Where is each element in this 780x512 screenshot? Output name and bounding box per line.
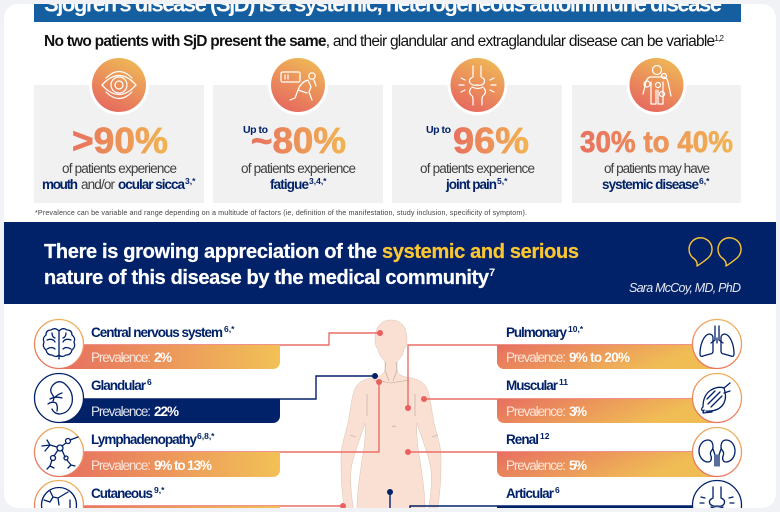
panel: systemic disease: 6,* bbox=[699, 176, 710, 186]
connector: central nervous system bbox=[84, 330, 383, 345]
connector: cutaneous bbox=[84, 503, 346, 509]
row: lymphadenopathy: 6,8,* bbox=[197, 431, 215, 441]
row: pulmonary bbox=[497, 320, 742, 369]
row: muscular: 11 bbox=[559, 377, 568, 387]
row: glandular bbox=[34, 374, 280, 423]
quote heading: There is growing appreciation of the bbox=[44, 241, 377, 263]
row: lymphadenopathy: Lymphadenopathy bbox=[91, 432, 197, 447]
icon: skin bbox=[42, 488, 76, 512]
panel: joint pain: 5,* bbox=[497, 176, 508, 186]
subheading: No two patients with SjD present the same, and their glandular and extraglandular disease can be variable bbox=[44, 33, 715, 50]
panel: sicca: 3,* bbox=[185, 176, 196, 186]
panel: fatigue: Up to bbox=[243, 124, 268, 136]
row: articular: 6 bbox=[555, 485, 560, 495]
row: glandular: 22% bbox=[154, 404, 179, 419]
row: pulmonary: Pulmonary bbox=[506, 325, 567, 340]
panel: systemic disease: systemic disease bbox=[602, 177, 699, 192]
icon: lungs bbox=[700, 326, 734, 356]
icon: joint bbox=[700, 487, 734, 508]
row: articular: Articular bbox=[506, 486, 555, 501]
row: articular bbox=[497, 480, 742, 512]
row: central nervous system: 6,* bbox=[224, 324, 235, 334]
quote heading: systemic and serious bbox=[382, 241, 579, 263]
row: glandular: 6 bbox=[147, 377, 152, 387]
connector: articular bbox=[387, 489, 692, 512]
panel: fatigue: ~80% bbox=[251, 120, 346, 161]
body figure bbox=[341, 320, 441, 512]
panel: joint pain: 96% bbox=[453, 120, 529, 161]
row: cutaneous bbox=[34, 480, 280, 512]
panel: fatigue: 3,4,* bbox=[309, 176, 327, 186]
icon: lymph nodes bbox=[42, 437, 78, 469]
row: muscular: Prevalence: bbox=[506, 404, 566, 419]
row: central nervous system: Central nervous system bbox=[91, 325, 223, 340]
subheading: 1,2 bbox=[714, 34, 725, 43]
icon: body with affected sites bbox=[643, 66, 671, 104]
row: lymphadenopathy: Prevalence: bbox=[91, 458, 151, 473]
row: muscular: Muscular bbox=[506, 378, 559, 393]
connector: renal bbox=[405, 449, 692, 455]
icon: eye bbox=[102, 72, 136, 98]
panel: sicca: of patients experience bbox=[62, 161, 177, 176]
panel: fatigue: of patients experience bbox=[241, 161, 356, 176]
row: renal: 12 bbox=[540, 431, 550, 441]
row: central nervous system: 2% bbox=[154, 350, 172, 365]
row: muscular: 3% bbox=[569, 404, 587, 419]
panel: joint pain: joint pain bbox=[445, 177, 497, 192]
icon: gland bbox=[48, 382, 72, 414]
footnote: *Prevalence can be variable and range depending on a multitude of factors (ie, definition of the manifestation, study inclusion, specificity of symptom). bbox=[35, 208, 527, 217]
panel: sicca: ocular sicca bbox=[118, 177, 185, 192]
quote heading: 7 bbox=[489, 267, 495, 279]
icon: knee joint bbox=[459, 66, 496, 105]
panel: systemic disease bbox=[572, 55, 741, 203]
panel: joint pain bbox=[392, 55, 562, 203]
icon: kidneys bbox=[699, 440, 735, 466]
row: cutaneous: 9,* bbox=[154, 485, 165, 495]
row: central nervous system bbox=[34, 320, 280, 369]
row: renal: Prevalence: bbox=[506, 458, 566, 473]
connector: pulmonary bbox=[405, 345, 692, 411]
quote band bbox=[4, 222, 776, 304]
panel: systemic disease: of patients may have bbox=[604, 161, 710, 176]
panel: sicca: >90% bbox=[72, 120, 168, 161]
panel: joint pain: of patients experience bbox=[420, 161, 535, 176]
row: cutaneous: Cutaneous bbox=[91, 486, 153, 501]
icon: muscle bbox=[702, 383, 730, 413]
panel: systemic disease: 30% to 40% bbox=[580, 126, 733, 159]
attribution: Sara McCoy, MD, PhD bbox=[629, 281, 741, 295]
row: pulmonary: 10,* bbox=[568, 324, 584, 334]
connector: lymphadenopathy bbox=[84, 379, 382, 452]
panel: joint pain: Up to bbox=[426, 124, 451, 136]
panel: fatigue: fatigue bbox=[270, 177, 309, 192]
quote heading: nature of this disease by the medical community bbox=[44, 267, 490, 289]
row: lymphadenopathy: 9% to 13% bbox=[154, 458, 212, 473]
row: glandular: Glandular bbox=[91, 378, 147, 393]
connector: glandular bbox=[84, 373, 378, 399]
row: renal bbox=[497, 428, 742, 477]
panel: sicca: mouth bbox=[42, 177, 78, 192]
panel: sicca bbox=[34, 55, 204, 203]
panel: fatigue bbox=[213, 55, 383, 203]
icon: quotation marks bbox=[689, 238, 741, 266]
row: glandular: Prevalence: bbox=[91, 404, 151, 419]
quote heading bbox=[44, 241, 579, 289]
connector: muscular bbox=[421, 396, 692, 402]
panel: sicca: and/or bbox=[81, 177, 116, 192]
row: muscular bbox=[497, 374, 742, 423]
row: pulmonary: 9% to 20% bbox=[569, 350, 630, 365]
icon: tired person with low battery bbox=[281, 72, 316, 100]
icon: brain bbox=[43, 329, 75, 359]
row: central nervous system: Prevalence: bbox=[91, 350, 151, 365]
row: lymphadenopathy bbox=[34, 428, 280, 477]
row: renal: 5% bbox=[569, 458, 587, 473]
row: pulmonary: Prevalence: bbox=[506, 350, 566, 365]
row: renal: Renal bbox=[506, 432, 539, 447]
